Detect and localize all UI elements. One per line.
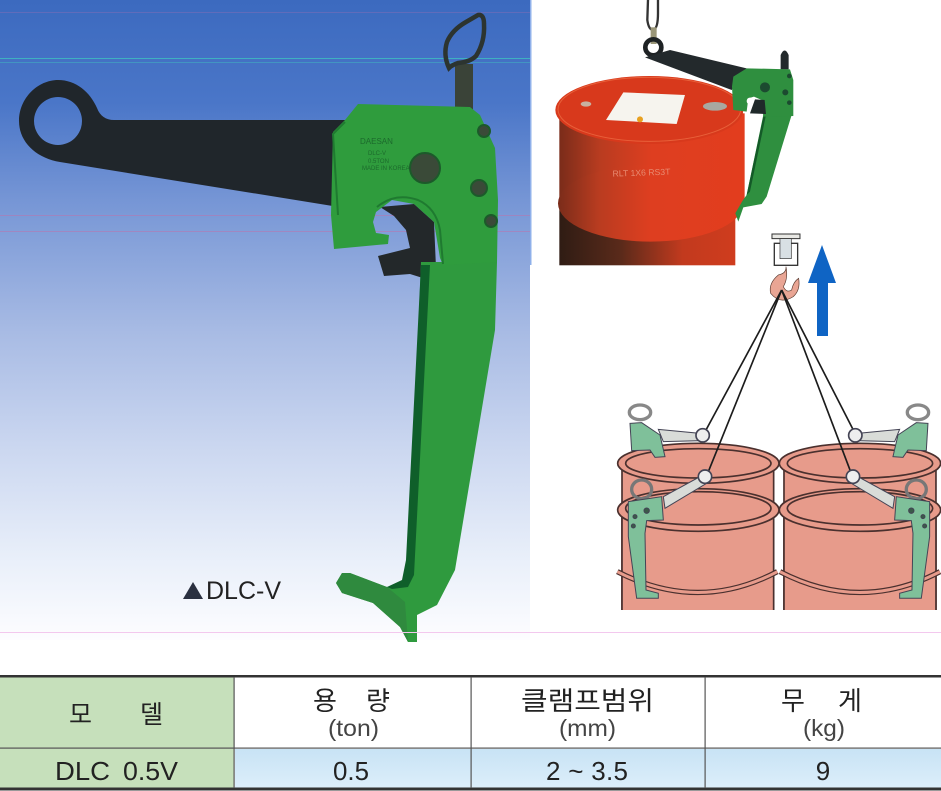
lever foot shading: [336, 573, 408, 642]
arrow: lift upward: [808, 245, 836, 336]
row: DLC 0.5V values: [55, 756, 830, 786]
back clamp: [849, 405, 929, 457]
black arm with lifting eye: [19, 80, 350, 208]
specification table: [0, 675, 941, 790]
red drum: RLT 1X6 RS3T: [612, 167, 671, 179]
bolts: [410, 125, 497, 227]
green head: [331, 104, 498, 265]
row: DLC 0.5V values: 0.5: [333, 756, 369, 786]
lever dark side face: [387, 265, 430, 589]
small clamp arm: [645, 50, 747, 90]
pull ring and rod: [445, 15, 484, 110]
lifting rope and eye: [645, 0, 661, 55]
header: weight: [781, 686, 862, 741]
header: clamp range: [521, 686, 654, 741]
header: weight: 게: [838, 686, 862, 716]
front right drum: [779, 489, 941, 610]
green lever: [336, 262, 497, 642]
front clamp: [628, 470, 712, 598]
stamped marks on head: MADE IN KOREA: [362, 166, 410, 172]
row: DLC 0.5V values: 0.5V: [123, 756, 179, 786]
header: capacity: 량: [366, 686, 390, 716]
header: capacity: (ton): [328, 715, 379, 741]
back clamp: [629, 405, 709, 457]
product label: DLC-V: DLC-V: [206, 577, 281, 605]
faint page line: [0, 632, 941, 633]
stamped marks on head: [360, 137, 410, 172]
stamped marks on head: DAESAN: [360, 137, 393, 146]
front clamp: [846, 470, 930, 598]
left side clamps: [628, 405, 712, 598]
table cell fills: [0, 677, 941, 788]
front left drum: [617, 489, 779, 610]
header: weight: (kg): [803, 715, 845, 741]
back left drum: [618, 443, 779, 610]
drums: [617, 443, 941, 610]
right side clamps: [846, 405, 930, 598]
row: DLC 0.5V values: DLC: [55, 756, 110, 786]
header: weight: 무: [781, 686, 805, 716]
header: capacity: [313, 686, 390, 741]
table rules: [0, 675, 941, 790]
stamped marks on head: 0.5TON: [368, 159, 389, 165]
header: clamp range: 클램프범위: [521, 686, 654, 716]
back right drum: [779, 443, 941, 610]
header: capacity: 용: [313, 686, 337, 716]
header: model: 모: [69, 701, 92, 729]
lifting ropes: [706, 290, 853, 472]
red drum: [555, 76, 745, 265]
row: DLC 0.5V values: 2 ~ 3.5: [546, 756, 628, 786]
header: model: 델: [140, 701, 163, 729]
row: DLC 0.5V values: 9: [816, 756, 830, 786]
icon: crane hook: [770, 234, 800, 300]
stamped marks on head: DLC-V: [368, 151, 386, 157]
product photo: DLC-V clamp: [19, 15, 498, 642]
panel: product photo background: [0, 0, 532, 640]
small clamp: [732, 50, 793, 222]
dark jaw interior and handle: [378, 204, 436, 279]
header: clamp range: (mm): [559, 715, 616, 741]
photo: clamp lifting a red drum: [555, 0, 793, 265]
header: model: [69, 701, 163, 729]
diagram: four drums lifted by clamps: [617, 290, 941, 610]
